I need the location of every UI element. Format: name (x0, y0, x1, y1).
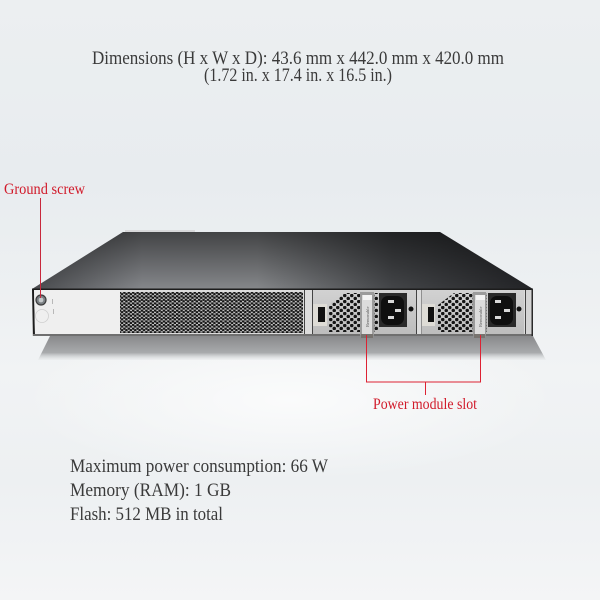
icon: ground screw (36, 295, 54, 322)
power module 1 (313, 290, 416, 338)
module 2 latch (422, 304, 435, 326)
specifications text (70, 456, 328, 525)
module 1 latch (313, 304, 327, 326)
title: dimensions (92, 48, 504, 86)
device: firewall rear view (32, 230, 546, 360)
power module 2 (422, 290, 524, 338)
label: ground screw: Ground screw (4, 181, 86, 198)
module 2 power socket (488, 293, 516, 327)
title: dimensions: (1.72 in. x 17.4 in. x 16.5 in.) (204, 65, 392, 86)
device shadow (38, 336, 546, 360)
label: power module slot: Power module slot (373, 396, 478, 413)
ventilation mesh (120, 292, 303, 333)
bracket: power module leader lines (366, 335, 480, 395)
module 1 power socket (379, 293, 407, 327)
title: dimensions: Dimensions (H x W x D): 43.6 mm x 442.0 mm x 420.0 mm (92, 48, 504, 69)
device top face (32, 230, 533, 289)
module 2 vent (438, 293, 487, 332)
arrow: ground screw leader line (40, 198, 42, 298)
device rear panel (32, 289, 533, 336)
specifications text: Memory (RAM): 1 GB (70, 480, 231, 501)
specifications text: Flash: 512 MB in total (70, 504, 223, 525)
module 2 handle: Removable (478, 306, 483, 327)
module 1 vent (329, 293, 378, 332)
module 1 handle: Removable (365, 306, 370, 327)
left white plate (34, 290, 120, 334)
right end plate (526, 290, 532, 334)
specifications text: Maximum power consumption: 66 W (70, 456, 328, 477)
